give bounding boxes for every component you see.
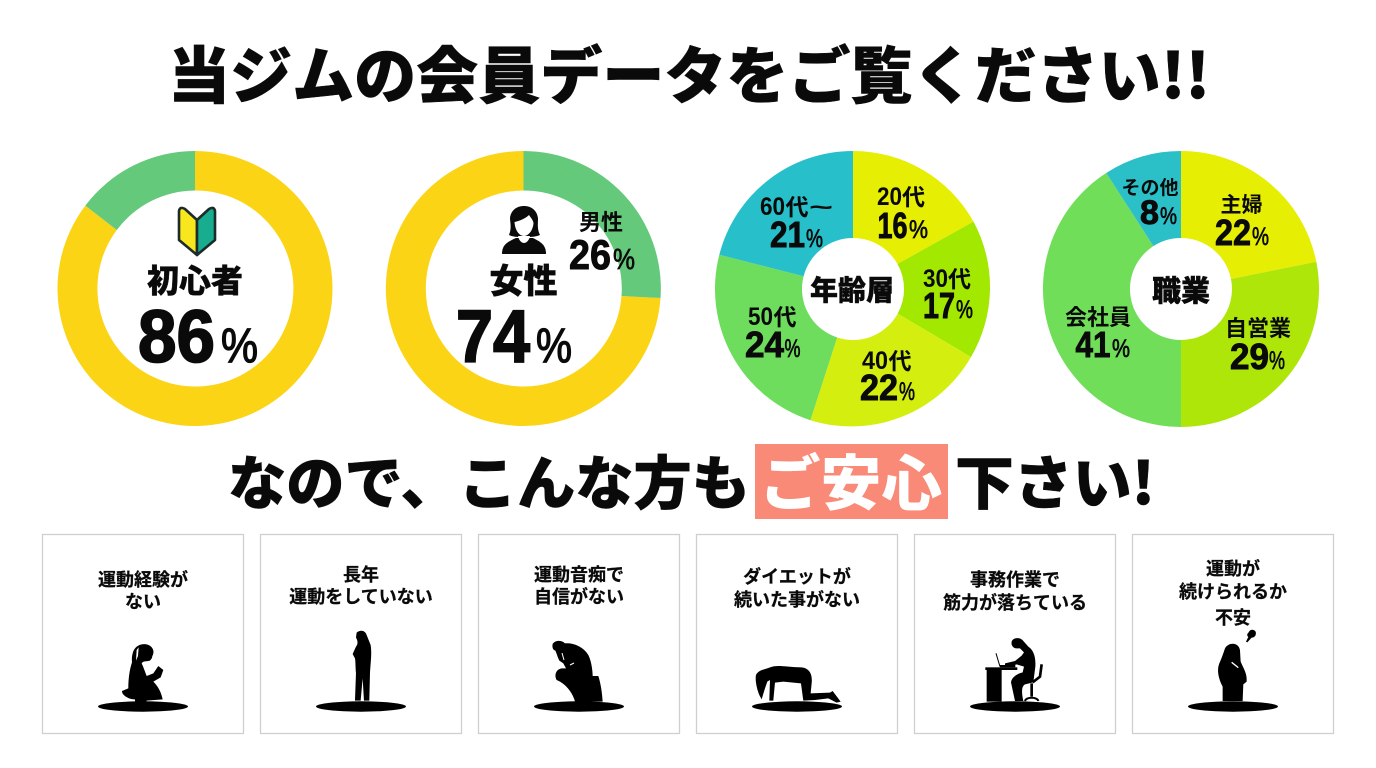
card: desk work, weak muscles (914, 534, 1116, 734)
segment: 30s (898, 222, 990, 357)
title: 当ジムの会員データをご覧ください!! (168, 26, 1210, 116)
label: 40s 22%: 22 (860, 367, 898, 408)
subheading text left: なので、こんな方も (228, 437, 750, 521)
panel: age group pie chart (715, 151, 990, 426)
subheading text right: 下さい! (955, 437, 1155, 521)
label: homemaker 22%: 22 (1215, 212, 1251, 253)
segment: company employee (1043, 173, 1181, 427)
value: 74%: % (536, 320, 572, 373)
card text (943, 566, 1087, 615)
label: 20s 16%: 20 (877, 183, 902, 211)
card: diets never lasted (696, 534, 898, 734)
label: homemaker 22%: 主婦 (1220, 189, 1262, 219)
label: 40s 22%: % (899, 378, 915, 406)
highlighted text: ご安心 (760, 436, 942, 523)
label: 50s 24%: % (784, 335, 800, 363)
icon: woman bust (502, 206, 546, 254)
value: 26%: % (613, 244, 635, 276)
donut segment: women 74% (386, 151, 660, 426)
label: 30s 17%: 30 (923, 265, 948, 293)
label: 40s 22%: 代 (888, 342, 912, 376)
card text: 運動をしていない (289, 583, 433, 609)
icon: beginner mark (179, 208, 215, 255)
card: anxious about continuing (1132, 534, 1334, 734)
card text (289, 561, 433, 609)
label: men: 男性 (579, 205, 623, 237)
card text (1179, 555, 1287, 630)
label: other 8%: その他 (1121, 173, 1179, 200)
icon: worried woman silhouette (1188, 630, 1278, 712)
label: 50s 24%: 代 (774, 298, 796, 332)
label: company employee 41%: % (1112, 335, 1130, 363)
center label: occupation: 職業 (1152, 268, 1210, 310)
label: self-employed 29%: % (1269, 347, 1285, 375)
card text (734, 563, 860, 612)
card text: 長年 (343, 561, 379, 587)
icon: standing woman silhouette (316, 631, 406, 712)
card text: 続いた事がない (734, 586, 860, 612)
value: 86% (138, 295, 258, 378)
segment: 40s (810, 314, 971, 426)
label: other 8%: % (1160, 203, 1177, 230)
label: 60s and over 21%: 21 (770, 214, 805, 255)
donut segment: beginners 86% (57, 151, 332, 426)
label: women: 女性 (490, 254, 558, 303)
card text: 運動が (1206, 555, 1260, 581)
label: 60s and over 21%: ~ (809, 194, 833, 220)
card text: 運動経験が (98, 566, 188, 592)
card: no exercise experience (42, 534, 244, 734)
card: no exercise for years (260, 534, 462, 734)
label: 30s 17%: 17 (923, 285, 955, 326)
segment: other (1106, 151, 1181, 246)
segment: 50s (715, 255, 837, 420)
label: 50s 24% (745, 298, 800, 365)
card text: 筋力が落ちている (943, 589, 1087, 615)
segment: homemaker (1181, 151, 1316, 279)
donut segment: others 14% (85, 151, 195, 230)
value: 86%: % (221, 320, 258, 373)
card text: ない (125, 588, 161, 614)
panel: beginners donut chart (57, 151, 332, 426)
value: 86%: 86 (138, 295, 215, 378)
panel: gender donut chart (386, 151, 661, 426)
card text: 自信がない (534, 583, 624, 609)
segment: self-employed (1181, 262, 1319, 427)
card text (534, 561, 624, 609)
label: 20s 16%: 代 (902, 178, 925, 212)
label: company employee 41% (1065, 300, 1131, 365)
card text: 不安 (1215, 604, 1251, 630)
segment: 20s (853, 151, 974, 264)
icon: girl reading silhouette (98, 644, 188, 712)
donut segment: men 26% (524, 151, 661, 298)
label: 30s 17% (923, 260, 973, 326)
label: 40s 22% (860, 342, 915, 408)
card text: 続けられるか (1179, 578, 1287, 604)
segment: 60s and over (719, 151, 853, 276)
label: beginners: 初心者 (147, 256, 243, 302)
label: 20s 16%: % (909, 216, 928, 244)
label: company employee 41%: 41 (1076, 324, 1110, 365)
label: self-employed 29%: 自営業 (1225, 311, 1291, 343)
label: 60s and over 21%: % (806, 225, 823, 253)
label: self-employed 29%: 29 (1230, 336, 1269, 377)
value: 26%: 26 (569, 231, 611, 278)
card: bad at sports (478, 534, 680, 734)
label: 60s and over 21%: 60 (760, 193, 785, 221)
card text: 事務作業で (970, 566, 1060, 592)
label: 30s 17%: % (956, 296, 973, 324)
label: 20s 16% (877, 178, 928, 246)
panel: occupation pie chart (1043, 151, 1319, 427)
icon: woman on all fours silhouette (752, 666, 842, 712)
label: 60s and over 21%: 代 (786, 188, 808, 222)
icon: desk worker silhouette (970, 638, 1060, 712)
subheading: reassurance message (228, 436, 1155, 523)
label: 30s 17%: 代 (948, 260, 971, 294)
highlight box (755, 444, 948, 519)
label: homemaker 22% (1215, 189, 1269, 253)
label: 60s and over 21% (760, 188, 833, 255)
card text: ダイエットが (743, 563, 851, 589)
card text (98, 566, 188, 614)
center label: age group: 年齢層 (810, 269, 894, 309)
label: self-employed 29% (1225, 311, 1291, 377)
label: company employee 41%: 会社員 (1065, 300, 1131, 332)
label: 50s 24%: 50 (748, 303, 773, 331)
label: 40s 22%: 40 (862, 347, 888, 375)
icon: thinker silhouette (534, 641, 624, 712)
label: 20s 16%: 16 (878, 205, 908, 246)
value: 74%: 74 (456, 295, 530, 378)
label: homemaker 22%: % (1252, 223, 1269, 251)
label: other 8%: 8 (1140, 194, 1159, 232)
label: 50s 24%: 24 (745, 324, 784, 365)
label: other 8% (1121, 173, 1179, 232)
card text: 運動音痴で (534, 561, 624, 587)
